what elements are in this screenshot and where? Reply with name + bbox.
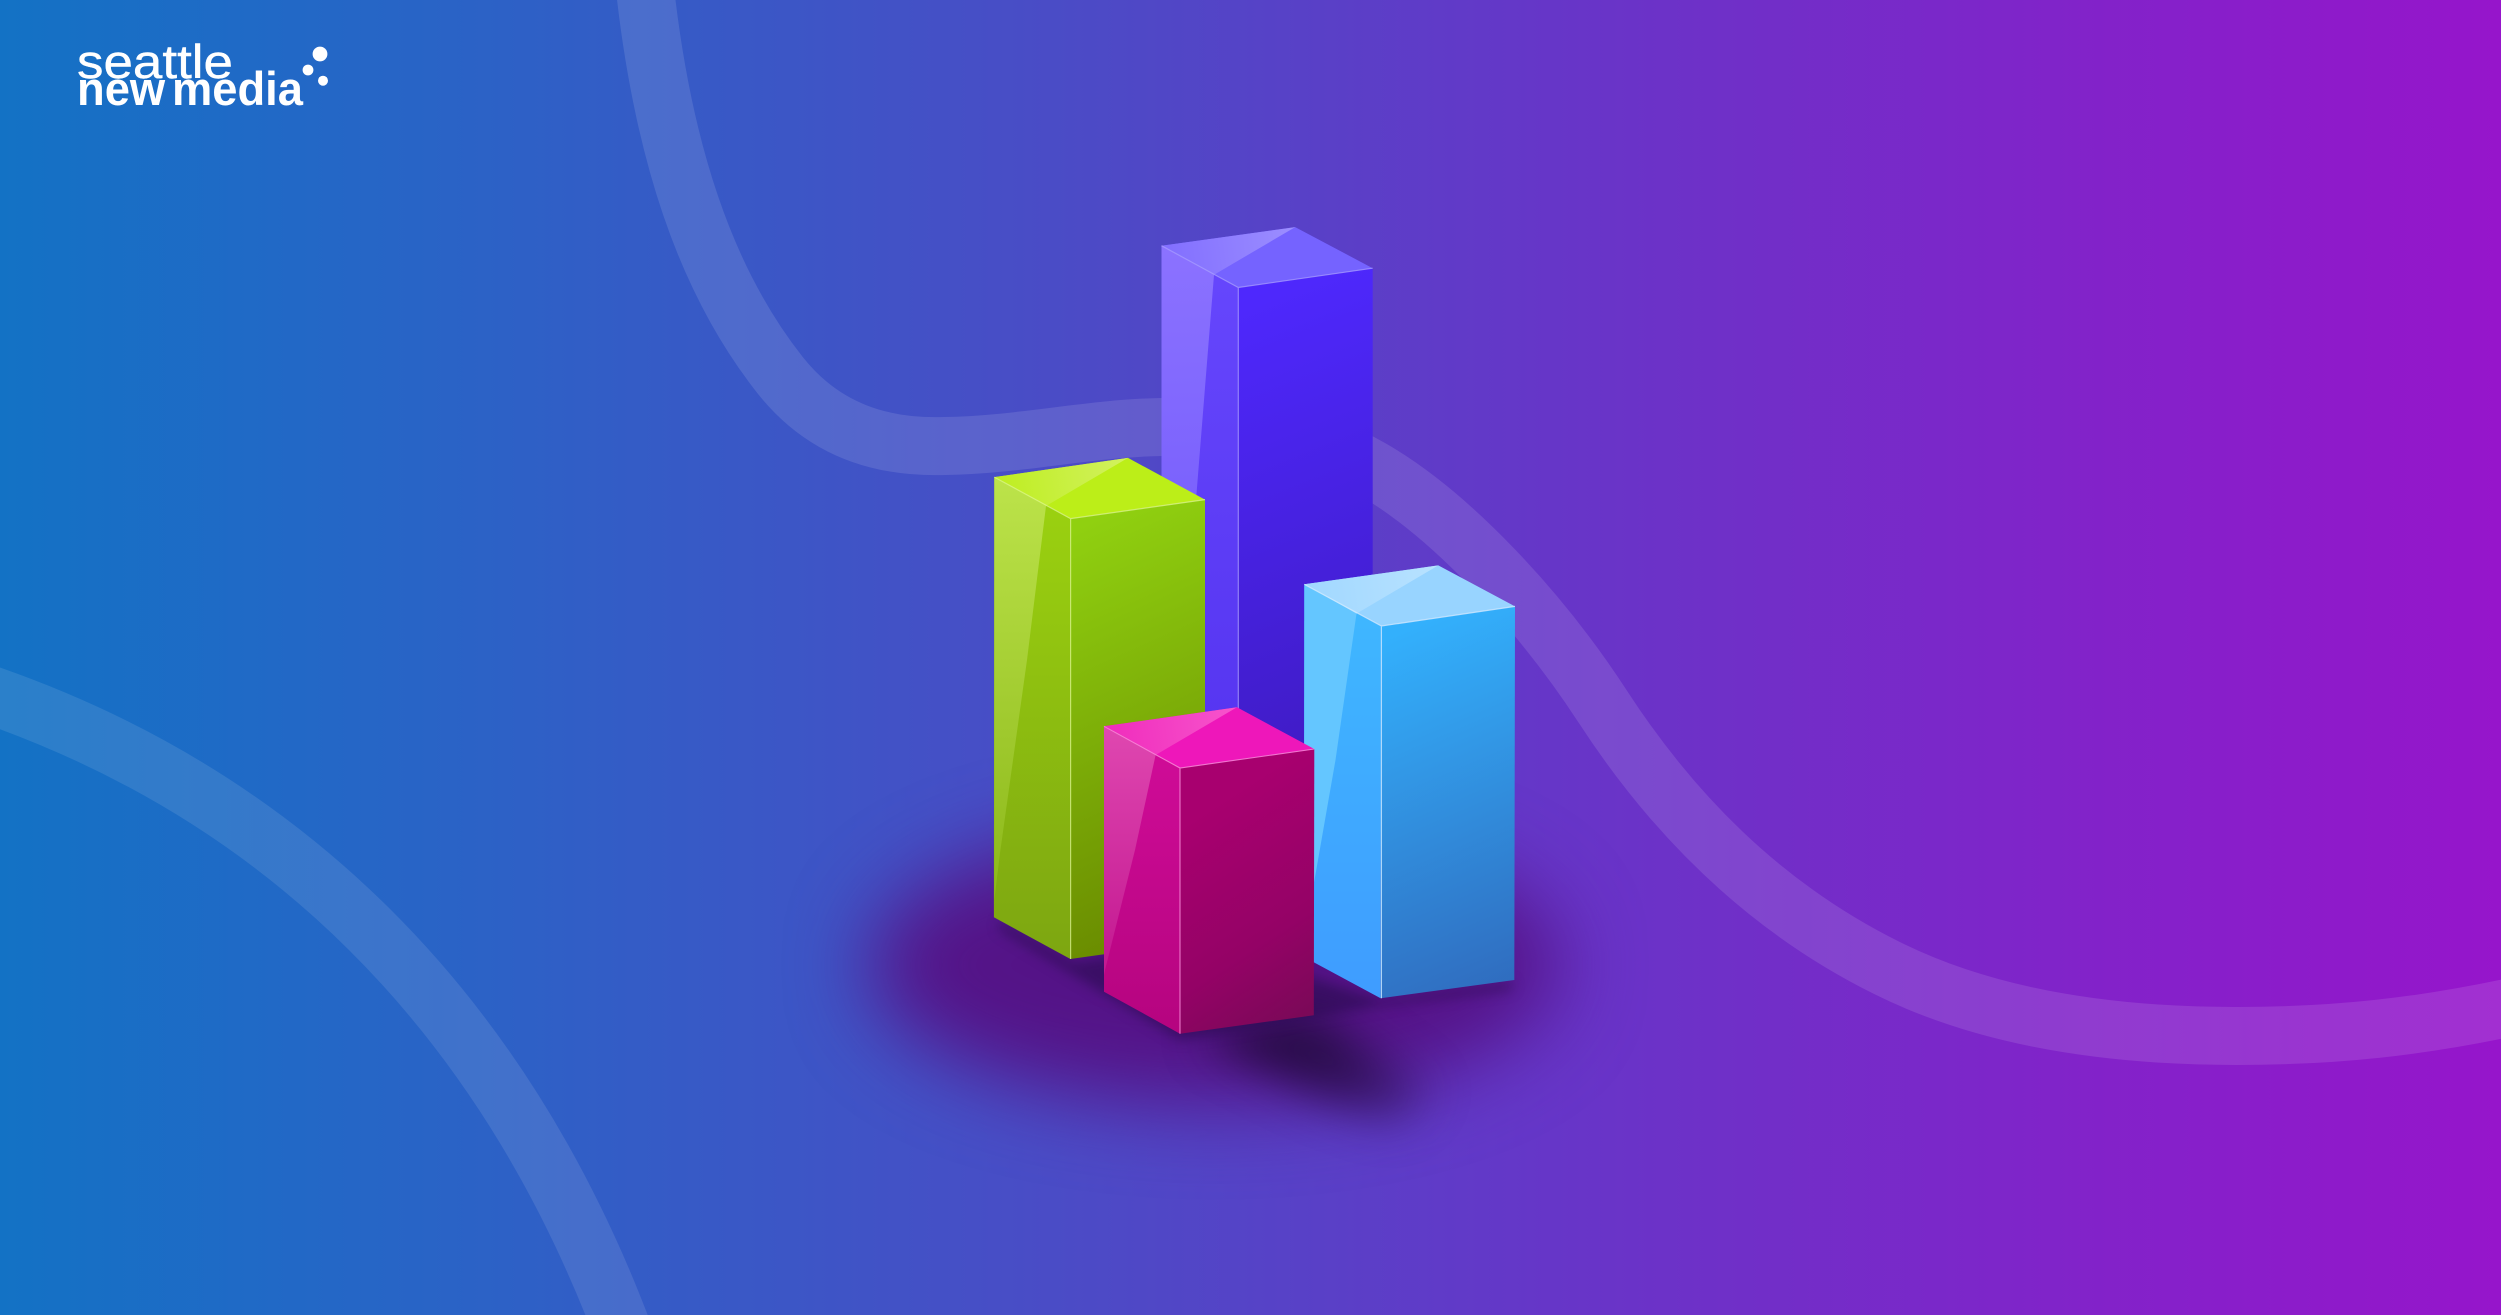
pink bar cast shadow	[1200, 1012, 1435, 1125]
ground shadow	[870, 825, 1560, 1125]
ribbon: bottom left curve	[0, 688, 628, 1315]
logo word: seattle: seattle	[77, 35, 233, 88]
bar: magenta (front)	[1104, 707, 1314, 1034]
bar: blue	[1304, 565, 1515, 998]
bar: green	[994, 458, 1205, 959]
ribbon: main flowing curve	[644, 0, 2501, 1036]
logo: seattle new media	[77, 35, 328, 115]
bar: purple (tallest)	[1162, 227, 1373, 850]
logo dots	[303, 47, 328, 86]
logo words: new media: new media	[77, 62, 304, 115]
